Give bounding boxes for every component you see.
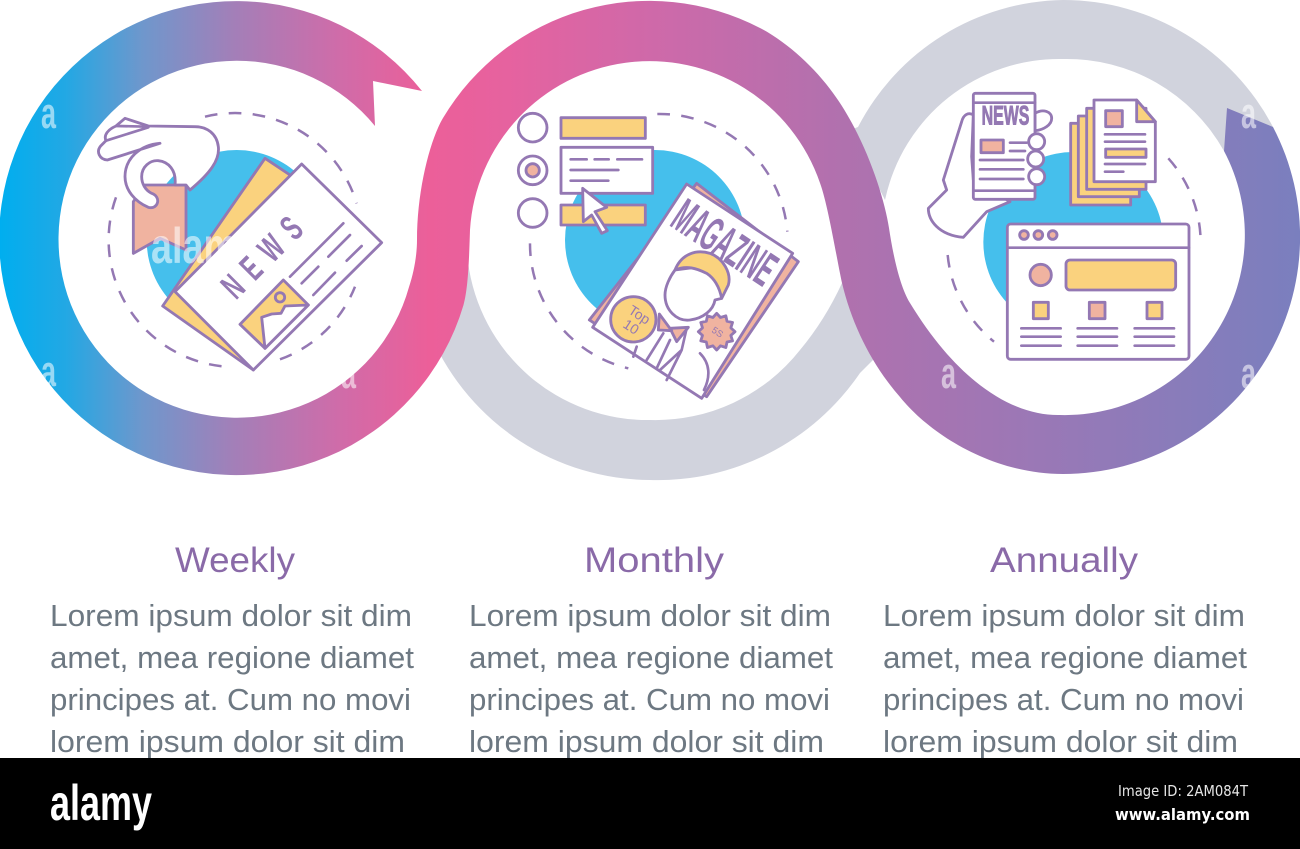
- badge: top 10: Top: [626, 302, 654, 328]
- top yellow bar: [561, 118, 645, 138]
- text block: weekly: Lorem ipsum dolor sit dim: [50, 598, 412, 633]
- footer bar: [0, 758, 1300, 849]
- photo mountain: [262, 305, 308, 348]
- footer url: www.alamy.com: [1115, 805, 1250, 824]
- browser window: [1007, 224, 1189, 359]
- watermark letters: alam: [151, 218, 237, 274]
- watermark letters: a: [41, 347, 56, 396]
- watermark letters: a: [341, 349, 356, 398]
- article lines: [290, 223, 362, 295]
- text block: monthly: lorem ipsum dolor sit dim: [469, 724, 824, 759]
- text block: weekly: [50, 598, 414, 759]
- watermark letters: a: [1241, 89, 1256, 138]
- heading: weekly: Weekly: [175, 541, 296, 580]
- document lines: [1105, 134, 1145, 172]
- badge: top 10: [611, 297, 656, 342]
- photo sun: [275, 293, 285, 302]
- grey ring: second circle lower half: [432, 262, 878, 480]
- icon group: phone, documents, web page: [928, 93, 1201, 359]
- dashed circle: [948, 158, 1201, 342]
- icon group: magazine: [518, 113, 798, 398]
- browser dots: [1020, 231, 1057, 239]
- bottom yellow bar: [561, 205, 645, 225]
- phone headline: NEWS: [982, 100, 1029, 130]
- collar: [658, 314, 688, 342]
- grey ring: third circle upper half: [850, 0, 1273, 200]
- holding hand: [928, 114, 1010, 237]
- cursor: [583, 188, 607, 233]
- radio options: [518, 113, 547, 227]
- badge: top 10: 10: [620, 316, 642, 338]
- watermark letters: [41, 89, 1256, 398]
- text block: annually: [883, 598, 1247, 759]
- blue blob: [565, 150, 745, 330]
- upper finger: [1035, 111, 1052, 131]
- content squares: [1033, 302, 1162, 319]
- text block: monthly: amet, mea regione diamet: [469, 640, 833, 675]
- document highlight: [1106, 149, 1146, 157]
- image id: Image ID: 2AM084T: [1118, 782, 1249, 800]
- icon group: newspaper: [99, 113, 382, 370]
- text block: monthly: [469, 598, 833, 759]
- badge: starburst: 5S: [710, 325, 725, 340]
- text block: weekly: lorem ipsum dolor sit dim: [50, 724, 405, 759]
- document thumbnail: [1106, 111, 1122, 127]
- text block: annually: lorem ipsum dolor sit dim: [883, 724, 1238, 759]
- dashed circle: [530, 114, 787, 368]
- phone picture: [981, 140, 1003, 153]
- blue blob: [983, 152, 1163, 332]
- text block: annually: principes at. Cum no movi: [883, 682, 1244, 717]
- text block: annually: amet, mea regione diamet: [883, 640, 1247, 675]
- hand: [99, 118, 219, 208]
- face: [665, 267, 722, 320]
- dashed circle: [109, 113, 357, 367]
- magazine title: MAGAZINE: [662, 189, 787, 297]
- browser header line: [1007, 244, 1189, 252]
- footer logo: alamy: [50, 775, 152, 831]
- gradient ribbon timeline: [0, 1, 1300, 475]
- badge: starburst: [698, 313, 735, 350]
- text block: weekly: amet, mea regione diamet: [50, 640, 414, 675]
- yellow back sheet: [163, 158, 290, 370]
- text block: weekly: principes at. Cum no movi: [50, 682, 411, 717]
- text block: annually: Lorem ipsum dolor sit dim: [883, 598, 1245, 633]
- folded corner: [1137, 100, 1155, 122]
- phone bands: [973, 103, 1035, 191]
- card lines: [571, 159, 642, 181]
- content lines: [1021, 328, 1174, 346]
- jacket and tie: [633, 328, 708, 390]
- newspaper page: [175, 164, 382, 370]
- price tag: [133, 185, 186, 253]
- watermark letters: a: [941, 349, 956, 398]
- magazine back sheet: [589, 183, 798, 397]
- text block: monthly: Lorem ipsum dolor sit dim: [469, 598, 831, 633]
- photo: [240, 280, 308, 348]
- banner: [1066, 260, 1176, 290]
- text block: monthly: principes at. Cum no movi: [469, 682, 830, 717]
- heading: annually: Annually: [990, 541, 1139, 580]
- stacked yellow pages: [1071, 108, 1146, 205]
- profile circle: [1030, 264, 1051, 286]
- finger lines: [106, 126, 148, 141]
- watermark letters: a: [41, 89, 56, 138]
- news headline: NEWS: [214, 201, 319, 307]
- phone: [973, 93, 1035, 199]
- white text card: [561, 147, 653, 193]
- phone text lines: [980, 143, 1027, 179]
- blue blob: [147, 150, 327, 330]
- watermark letters: a: [1241, 349, 1256, 398]
- heading: monthly: Monthly: [584, 541, 725, 580]
- front document: [1094, 100, 1155, 182]
- fingers: [1028, 134, 1045, 185]
- hair: [675, 252, 729, 298]
- magazine cover: [593, 184, 793, 398]
